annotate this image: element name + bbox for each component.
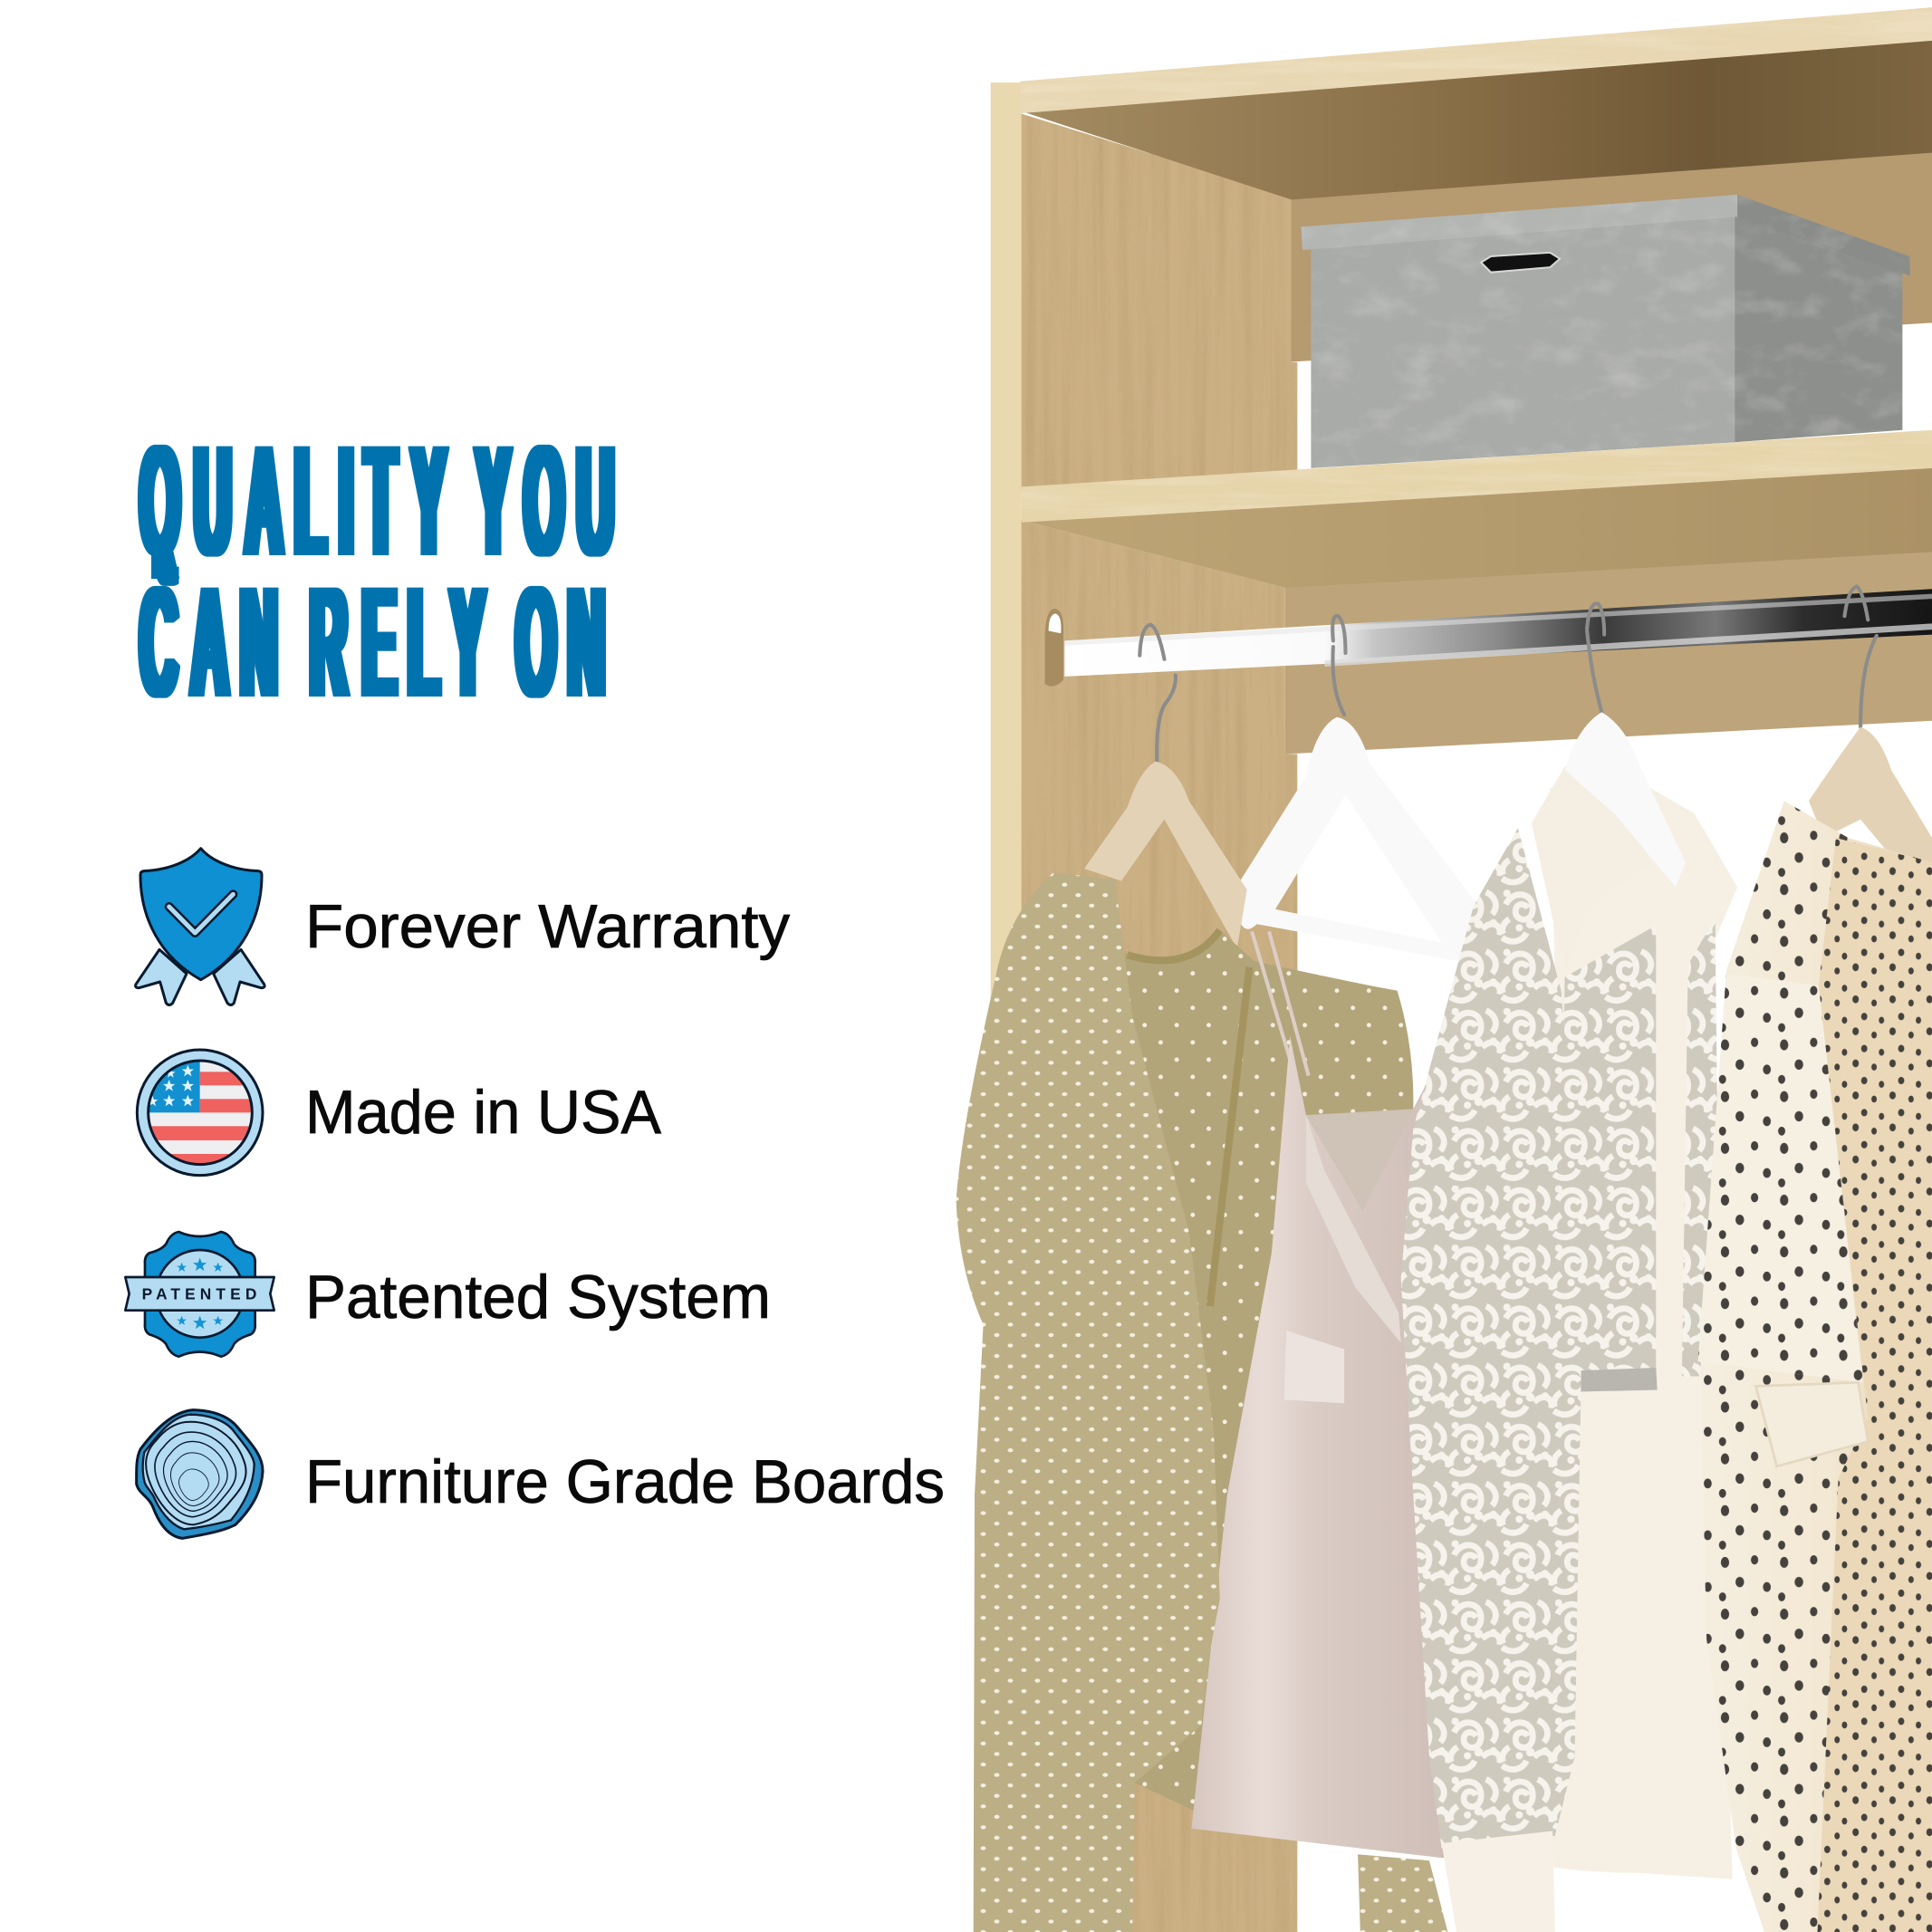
box side xyxy=(1733,209,1902,442)
shelf grain xyxy=(1020,0,1932,530)
blouse right panel xyxy=(1817,838,1932,1932)
wood face xyxy=(143,1415,255,1529)
dress straps xyxy=(1252,931,1309,1076)
seal center xyxy=(156,1250,244,1338)
text: forever warranty: Forever Warranty xyxy=(305,892,790,961)
shirt cuff xyxy=(1442,1831,1555,1932)
shirt hem stripe xyxy=(1555,1368,1658,1392)
cardigan neckline xyxy=(1128,930,1249,1306)
icon: usa flag xyxy=(137,1050,263,1176)
box front xyxy=(1311,209,1735,468)
box lid side xyxy=(1737,195,1910,276)
white hanger center xyxy=(1565,712,1686,887)
rod bracket xyxy=(1045,609,1063,687)
white hanger back xyxy=(1228,717,1478,964)
icon: wood rings xyxy=(137,1410,263,1538)
shield xyxy=(140,849,262,980)
shirt lace right xyxy=(1682,918,1720,1376)
storage box xyxy=(1302,195,1910,468)
seal stars xyxy=(177,1258,223,1329)
box handle xyxy=(1481,253,1560,273)
tan hanger right xyxy=(1809,727,1932,906)
blouse sleeve xyxy=(1698,974,1863,1382)
shirt lace front xyxy=(1559,926,1656,1376)
wood outer bark xyxy=(137,1410,263,1538)
polka blouse xyxy=(1698,801,1932,1932)
banner text: PATENTED xyxy=(142,1284,256,1302)
check mark xyxy=(169,894,233,933)
blouse sleeve dots xyxy=(1698,974,1863,1382)
flag inner outline xyxy=(149,1061,252,1165)
flag ring xyxy=(137,1050,263,1176)
cream shirt body xyxy=(1550,776,1737,1879)
text: patented system: Patented System xyxy=(305,1263,771,1331)
blouse base xyxy=(1700,801,1932,1932)
dress lace xyxy=(1283,1109,1415,1403)
text: made in usa: Made in USA xyxy=(305,1078,662,1147)
icon: warranty shield xyxy=(136,849,264,1004)
top shelf front edge xyxy=(1020,7,1932,113)
back rail upper xyxy=(1285,136,1932,362)
blouse sleeve fold xyxy=(1755,1382,1868,1466)
side panel xyxy=(1020,111,1297,1932)
top shelf underside xyxy=(1020,38,1932,199)
title xyxy=(140,415,614,730)
flag field xyxy=(149,1062,251,1163)
tan hanger left xyxy=(1084,762,1247,948)
right ribbon xyxy=(214,949,264,1004)
scalloped seal xyxy=(145,1232,255,1357)
title: QUALITYYOU xyxy=(140,415,614,589)
box texture xyxy=(1302,195,1910,468)
pink dress xyxy=(1191,1036,1444,1858)
lace sleeve xyxy=(1401,828,1583,1848)
shirt collar xyxy=(1532,766,1651,974)
hanger hooks xyxy=(1139,587,1877,762)
box lid front xyxy=(1302,195,1737,250)
banner xyxy=(125,1277,274,1311)
middle shelf front xyxy=(1022,430,1932,523)
middle shelf underside xyxy=(1020,466,1932,588)
blouse dots xyxy=(1700,801,1932,1932)
cardigan back xyxy=(1115,930,1413,1812)
icon: patented badge xyxy=(125,1232,274,1357)
title: CANRELYON xyxy=(140,556,605,730)
chrome rod xyxy=(1064,589,1932,677)
cardigan sleeve xyxy=(956,872,1220,1932)
text: furniture grade boards: Furniture Grade Boards xyxy=(305,1447,945,1516)
tree rings xyxy=(146,1422,246,1524)
closet illustration xyxy=(956,0,1932,1932)
cardigan hem fragment xyxy=(1358,1854,1447,1932)
back rail lower xyxy=(1285,530,1932,755)
left ribbon xyxy=(136,949,187,1004)
front stile xyxy=(991,82,1022,1932)
